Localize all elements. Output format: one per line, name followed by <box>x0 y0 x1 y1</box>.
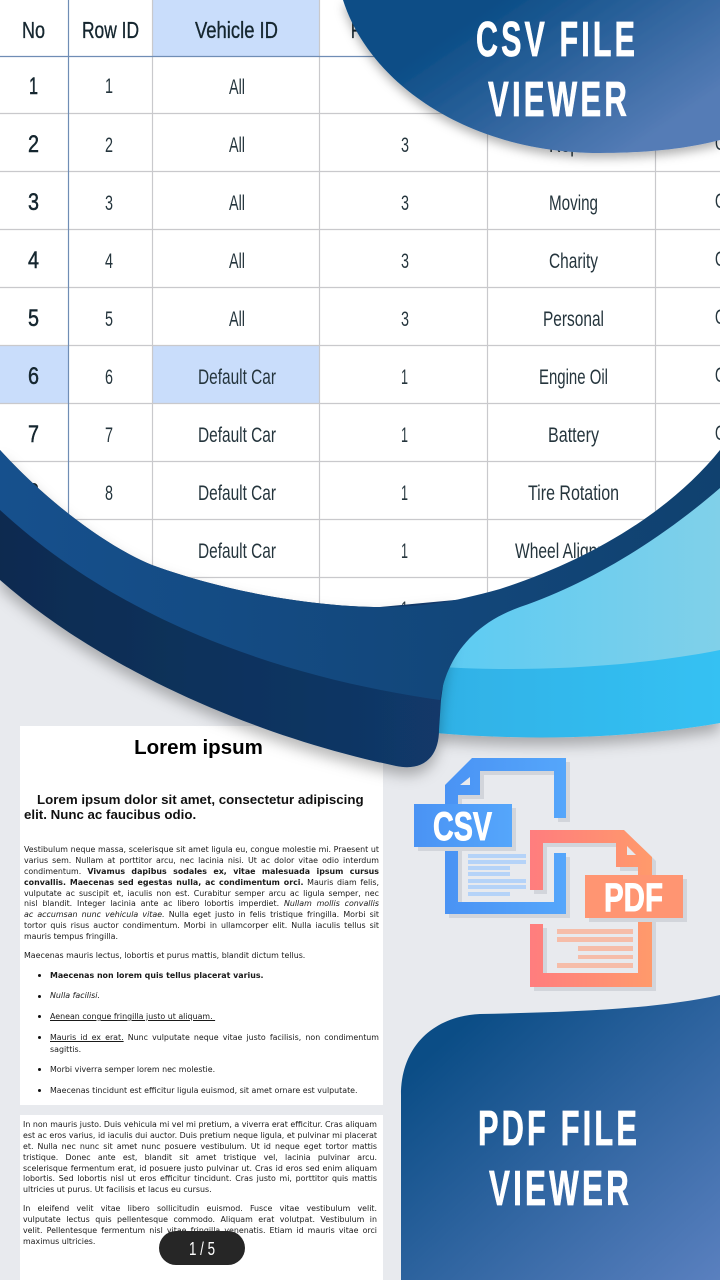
column: Vehicle ID: All <box>229 76 245 99</box>
panel: pdf file viewer title: VIEWER <box>489 1162 632 1216</box>
pdf body text page 2: et. Nulla nec nunc sit amet nunc posuere vestibulum. Ut id neque eget tortor mattis <box>23 1142 377 1151</box>
pdf body text page 2: est ac eros varius, id iaculis dui auctor. Duis pretium neque ligula, et pulvinar mi placerat <box>23 1131 377 1140</box>
column: No: 2 <box>28 131 39 158</box>
icon: csv document <box>414 758 570 918</box>
column: Vehicle ID: All <box>229 308 245 331</box>
pdf body text page 2: velit. Pellentesque fermentum nisl vitae fringilla venenatis. Etiam id mauris vitae orci <box>23 1226 377 1235</box>
column: type id: 1 <box>401 540 408 563</box>
column: type id <box>402 138 408 605</box>
pdf body text page 2 <box>23 1120 377 1246</box>
column: No: 4 <box>28 247 39 274</box>
column: service name: Battery <box>548 424 599 447</box>
column: No: 5 <box>28 305 39 332</box>
column: No: 6 <box>28 363 39 390</box>
column: Row ID: 3 <box>105 192 113 215</box>
swoosh: dark navy band <box>0 450 455 767</box>
column: Vehicle ID: Default Car <box>198 366 276 389</box>
column: Row ID: 4 <box>105 250 113 273</box>
pdf body text page 1: Vestibulum neque massa, scelerisque sit amet ligula eu, congue molestie mi. Praesent ut <box>24 845 379 854</box>
column: Row ID <box>105 75 113 505</box>
column: service name: Engine Oil <box>539 366 608 389</box>
column: No: 3 <box>28 189 39 216</box>
table panel <box>0 0 720 621</box>
swoosh: pale blue layer <box>443 485 720 669</box>
pdf body text page 1: convallis. Maecenas sed egestas nulla, ac condimentum orci. Mauris diam felis, <box>24 878 379 887</box>
column: Vehicle ID: Default Car <box>198 482 276 505</box>
pdf body text page 1: condimentum. Vivamus dapibus sodales ex, vitae malesuada ipsum cursus <box>24 867 379 876</box>
icon: csv document: CSV <box>433 805 492 849</box>
column: No <box>28 73 39 506</box>
pdf body text page 1: Maecenas non lorem quis tellus placerat varius. <box>50 971 264 980</box>
table header: Row ID <box>82 17 139 43</box>
column: Vehicle ID: All <box>229 134 245 157</box>
column: type id: 3 <box>401 192 409 215</box>
column: type id: 3 <box>401 250 409 273</box>
panel: csv file viewer title <box>343 0 720 153</box>
column: type id: 3 <box>401 308 409 331</box>
column: No: 8 <box>28 479 39 506</box>
column: Row ID: 6 <box>105 366 113 389</box>
pdf body text page 2: ultricies ut purus. Ut facilisis et lacus eu cursus. <box>23 1185 212 1194</box>
table header: F <box>351 17 360 43</box>
pdf heading: Lorem ipsum <box>134 736 263 759</box>
column: Vehicle ID <box>198 76 276 563</box>
pdf body text page 1: Morbi viverra semper lorem nec molestie. <box>50 1065 215 1074</box>
column: No: 7 <box>28 421 39 448</box>
page indicator pill <box>159 1231 245 1265</box>
column: Row ID: 5 <box>105 308 113 331</box>
pdf subheading: elit. Nunc ac faucibus odio. <box>24 807 196 822</box>
icon: csv and pdf file conversion <box>414 758 687 991</box>
swoosh: mid blue band <box>0 450 720 700</box>
column: clipped right column <box>716 140 720 440</box>
column: Row ID: 7 <box>105 424 113 447</box>
column: type id: 3 <box>401 134 409 157</box>
column: type id: 1 <box>401 366 408 389</box>
icon: pdf document <box>530 830 687 991</box>
pdf page 1 <box>20 726 383 1105</box>
column: type id: 1 <box>401 482 408 505</box>
pdf subheading: Lorem ipsum dolor sit amet, consectetur adipiscing <box>37 792 364 807</box>
column: service name: Personal <box>543 308 604 331</box>
column: service name: Tire Rotation <box>528 482 619 505</box>
pdf body text page 1: Maecenas tincidunt est efficitur ligula euismod, sit amet ornare est vulputate. <box>50 1086 358 1095</box>
column: type id: 1 <box>401 598 408 621</box>
icon: pdf document: PDF <box>604 876 663 920</box>
pdf body text page 1 <box>24 845 379 1095</box>
pdf body text page 2: In non mauris justo. Duis vehicula mi vel mi pretium, a viverra erat efficitur. Cras aliquam <box>23 1120 377 1129</box>
column: Vehicle ID: All <box>229 192 245 215</box>
column: Vehicle ID: Default Car <box>198 424 276 447</box>
column: service name: Moving <box>549 192 598 215</box>
column: service name <box>515 150 618 558</box>
pdf body text page 1: varius sem. Nullam at porttitor arcu, nec lacinia nisi. Ut ac dolor vitae odio interdum <box>24 856 379 865</box>
panel: csv file viewer title: VIEWER <box>488 73 630 127</box>
table header: Vehicle ID <box>195 17 278 43</box>
panel: pdf file viewer title <box>401 995 720 1280</box>
swoosh: cyan layer <box>436 485 720 738</box>
pdf body text page 2: scelerisque fermentum erat, id posuere justo pulvinar ut. Cras id eros sed enim aliquam <box>23 1164 377 1173</box>
column: No: 1 <box>29 73 38 100</box>
column: Row ID: 1 <box>105 75 113 98</box>
pdf body text page 1: Aenean congue fringilla justo ut aliquam. <box>50 1012 213 1021</box>
table header: No <box>22 17 45 43</box>
pdf body text page 2: maximus ultricies. <box>23 1237 95 1246</box>
column: Row ID: 2 <box>105 134 113 157</box>
table header <box>23 20 357 38</box>
pdf body text page 1: mauris tempus fringilla. <box>24 932 118 941</box>
pdf page 2 <box>20 1115 383 1280</box>
column: service name: Charity <box>549 250 598 273</box>
table highlights <box>0 0 319 403</box>
pdf subheading <box>24 792 364 822</box>
pdf body text page 1: Nulla facilisi. <box>50 991 100 1000</box>
column: Vehicle ID: Default Car <box>198 540 276 563</box>
pdf body text page 1: Maecenas mauris lectus, lobortis et purus mattis, blandit dictum tellus. <box>24 951 305 960</box>
page indicator pill: 1 / 5 <box>189 1239 215 1259</box>
pdf body text page 1: sagittis. <box>50 1045 81 1054</box>
column: service name: Wheel Alignment <box>515 540 632 563</box>
column: service name: Repair <box>549 134 598 157</box>
column: Vehicle ID: All <box>229 250 245 273</box>
column: type id: 1 <box>401 424 408 447</box>
column: Row ID: 8 <box>105 482 113 505</box>
